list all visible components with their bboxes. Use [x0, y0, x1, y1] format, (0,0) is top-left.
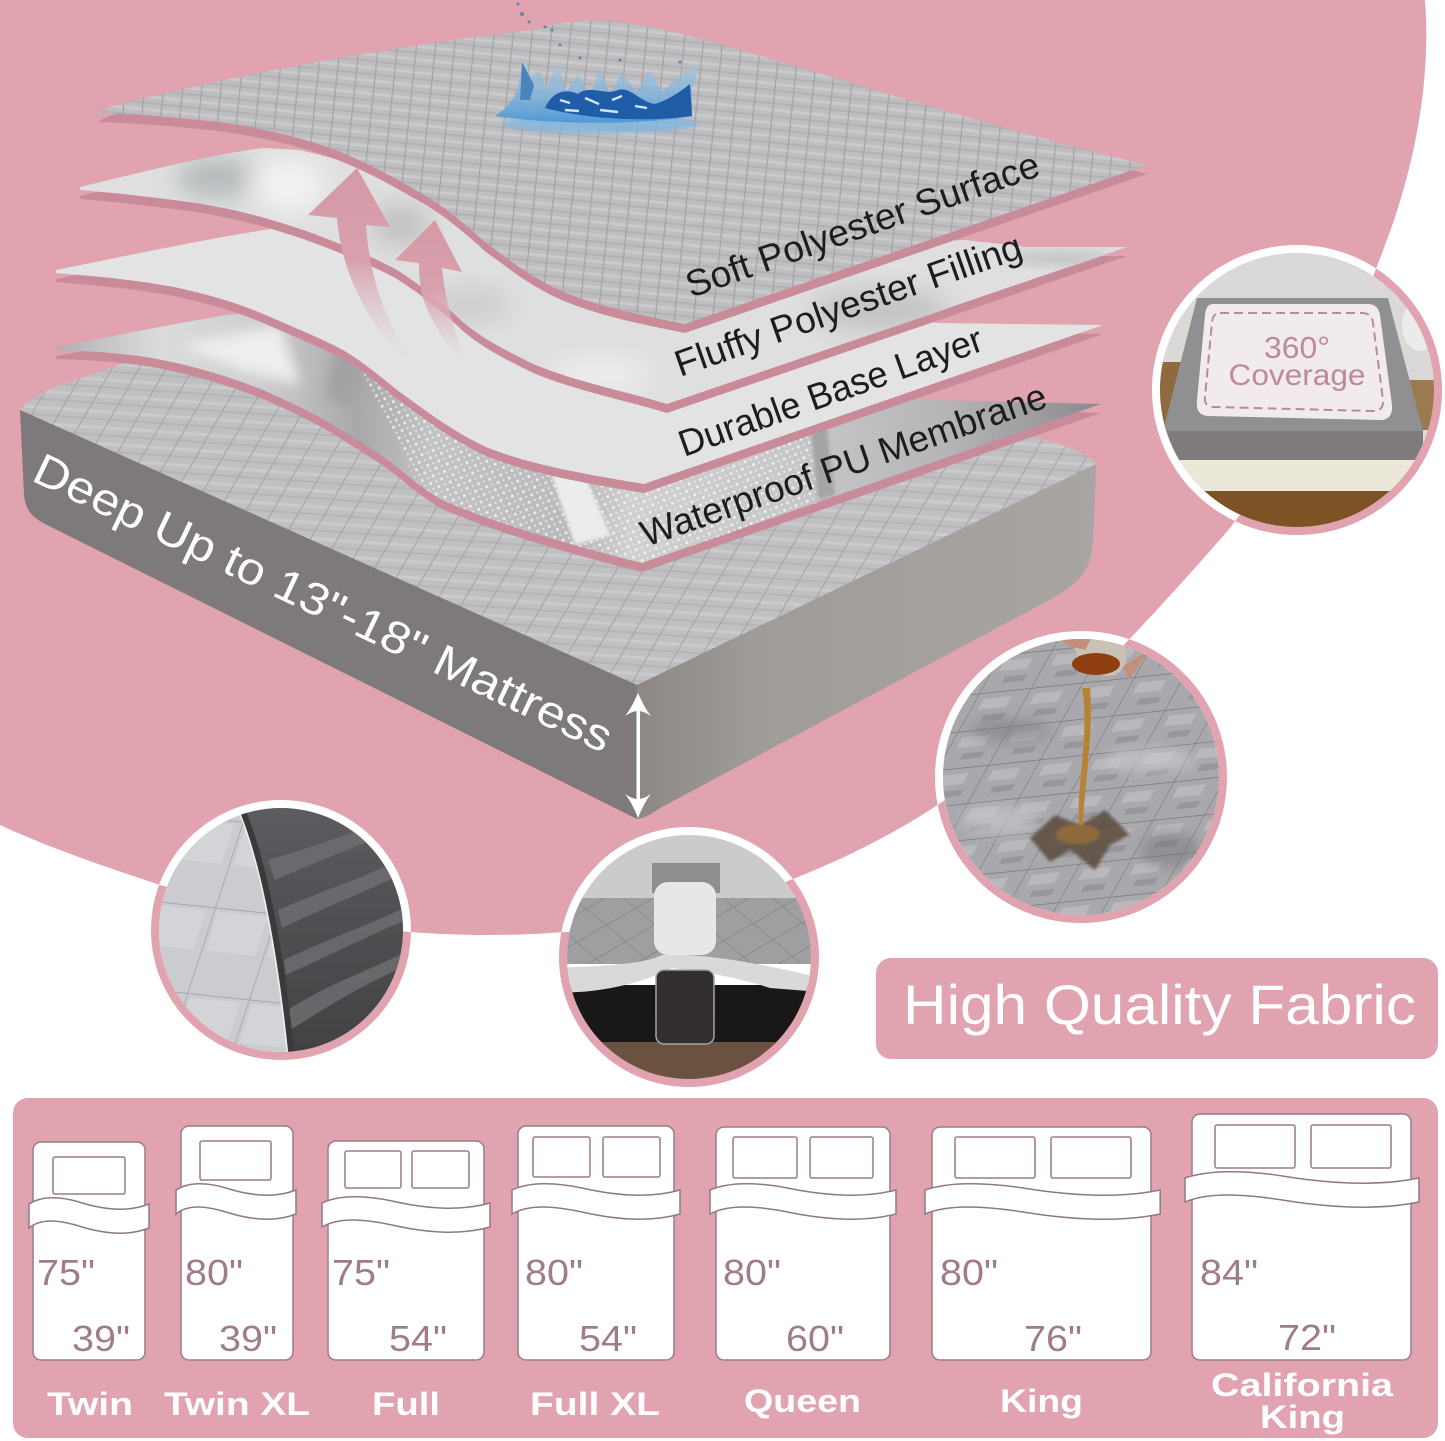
bed: full: 54" [389, 1318, 447, 1359]
bed: twin XL: Twin XL [164, 1386, 310, 1422]
photo circle: 360 coverage: Coverage [1228, 359, 1366, 392]
photo circle: liquid spill [936, 630, 1231, 925]
bed: queen [710, 1127, 896, 1419]
bed: king: 80" [940, 1252, 998, 1293]
bed: queen: 60" [786, 1318, 844, 1359]
bed: full: 75" [332, 1252, 390, 1293]
bed: queen: Queen [744, 1383, 861, 1419]
arrow: large [308, 168, 420, 373]
bed: california king: California [1211, 1367, 1393, 1403]
banner: high quality fabric: High Quality Fabric [903, 973, 1416, 1036]
bed: full XL: 54" [579, 1318, 637, 1359]
layer: fluffy polyester filling [80, 148, 1127, 413]
pink background shape [0, 0, 1426, 935]
label: waterproof PU membrane: Waterproof PU Membrane [635, 375, 1052, 555]
icon: water splash [495, 2, 700, 133]
coverage text: 360° [1264, 330, 1330, 365]
bed: california king: 72" [1278, 1317, 1336, 1358]
bed: king: 76" [1024, 1318, 1082, 1359]
bed: full XL [512, 1126, 680, 1422]
bed: california king: 84" [1200, 1252, 1258, 1293]
bed: twin: 39" [72, 1318, 130, 1359]
bed: full XL: Full XL [530, 1386, 660, 1422]
layer labels [635, 144, 1052, 555]
bed: twin XL [164, 1126, 310, 1422]
banner: high quality fabric [876, 958, 1438, 1059]
bed: twin XL: 39" [219, 1318, 277, 1359]
bed: twin [29, 1142, 149, 1422]
label: soft polyester surface: Soft Polyester Surface [680, 144, 1045, 306]
layer: durable base layer [56, 228, 1103, 493]
bed: full [322, 1141, 490, 1422]
bed: full XL: 80" [525, 1252, 583, 1293]
label: durable base layer: Durable Base Layer [673, 319, 988, 465]
arrow: mattress depth [625, 693, 651, 818]
layer: waterproof PU membrane [56, 313, 1101, 580]
layer: soft polyester surface [98, 20, 1147, 333]
bed: full: Full [372, 1386, 440, 1422]
bed: king: King [1000, 1383, 1083, 1419]
mattress depth label: Deep Up to 13"-18" Mattress [26, 443, 621, 762]
photo circle: 360 coverage [1150, 240, 1445, 541]
mattress right side [637, 464, 1096, 819]
photo circle: elastic hem [150, 800, 420, 1065]
bed: california king: King [1260, 1399, 1345, 1435]
bed: twin: 75" [37, 1252, 95, 1293]
coverage panel [1197, 304, 1392, 420]
photo circle: stretch test with bottle [555, 825, 825, 1092]
mottled fabric [970, 718, 1050, 742]
stream [1079, 688, 1091, 825]
mattress [20, 300, 1096, 819]
pink ventilation arrows [308, 168, 470, 373]
panel: bed size chart [13, 1098, 1438, 1438]
stain [1030, 810, 1130, 870]
bed: queen: 80" [723, 1252, 781, 1293]
mattress left side [20, 410, 637, 819]
glass [1072, 640, 1127, 676]
bottle [652, 863, 720, 893]
label: fluffy polyester filling: Fluffy Polyester Filling [669, 226, 1027, 385]
bed: king [925, 1127, 1160, 1419]
bed: california king [1185, 1114, 1419, 1435]
bed: twin: Twin [47, 1386, 133, 1422]
bed: twin XL: 80" [185, 1252, 243, 1293]
lifted sheet [555, 955, 820, 992]
mattress top surface [20, 300, 1096, 686]
arrow: small [395, 220, 470, 372]
